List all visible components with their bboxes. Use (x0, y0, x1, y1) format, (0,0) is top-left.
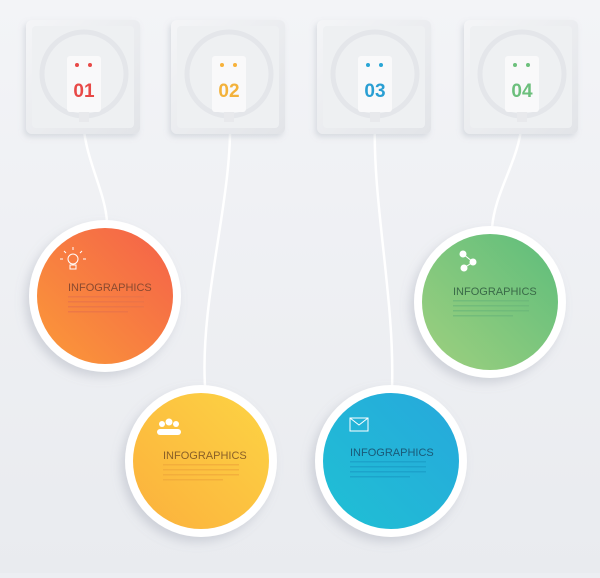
circle 1: INFOGRAPHICS (68, 282, 152, 294)
icon: people (157, 418, 181, 435)
icon: bulb (60, 247, 86, 269)
circle 4: INFOGRAPHICS (453, 286, 537, 298)
socket 03: 03 (364, 81, 386, 102)
socket 04: 04 (511, 81, 533, 102)
socket 03 (317, 20, 431, 134)
icon: nodes (460, 251, 476, 271)
circle 2: INFOGRAPHICS (163, 450, 247, 462)
circle 3: INFOGRAPHICS (350, 447, 434, 459)
circle 3 (315, 385, 467, 537)
circle 1 (29, 220, 181, 372)
socket 02 (171, 20, 285, 134)
socket 01: 01 (73, 81, 95, 102)
circle 4 (414, 226, 566, 378)
socket 04 (464, 20, 578, 134)
icon: mail (350, 418, 368, 431)
socket 01 (26, 20, 140, 134)
circle 2 (125, 385, 277, 537)
cables (83, 120, 522, 388)
socket 02: 02 (218, 81, 240, 102)
